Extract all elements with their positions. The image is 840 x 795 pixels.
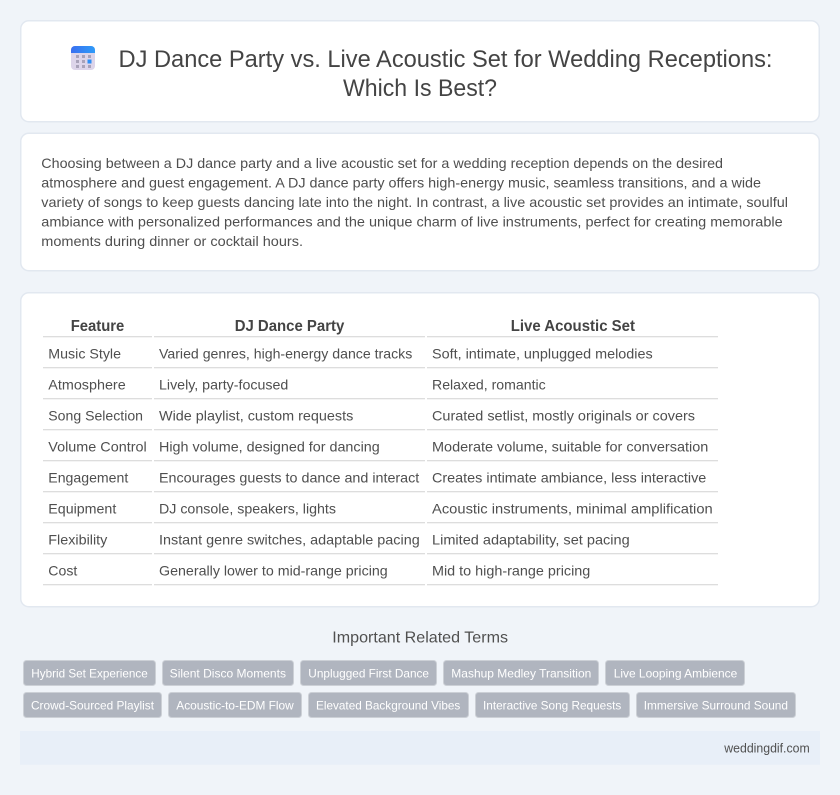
tag: hybrid set experience [24,660,156,686]
table row: music style: Soft, intimate, unplugged melodies [432,345,653,361]
table row: song selection [43,407,718,430]
table row: music style: Music Style [48,345,121,361]
table row: engagement: Encourages guests to dance and interact [159,469,419,485]
tag: interactive song requests: Interactive Song Requests [483,698,621,712]
related terms tags [24,660,796,718]
tag: acoustic-to-edm flow: Acoustic-to-EDM Flow [176,698,294,712]
table row: volume control: High volume, designed for dancing [159,438,380,454]
table row: equipment: Acoustic instruments, minimal amplification [432,500,713,516]
panel: comparison table [21,293,819,607]
title [118,46,772,102]
tag: acoustic-to-edm flow [168,692,302,718]
tag: elevated background vibes: Elevated Background Vibes [316,698,460,712]
tag: mashup medley transition: Mashup Medley Transition [451,666,591,680]
table header row: DJ Dance Party [235,318,344,335]
table row: cost: Cost [48,562,77,578]
tag: crowd-sourced playlist: Crowd-Sourced Playlist [31,698,155,712]
tag: live looping ambience [606,660,744,686]
table row: cost: Mid to high-range pricing [432,562,590,578]
table row: flexibility [43,531,718,554]
title: Which Is Best? [343,75,497,102]
tag: elevated background vibes [308,692,468,718]
panel: description [21,133,819,271]
table row: flexibility: Instant genre switches, adaptable pacing [159,531,420,547]
table row: song selection: Curated setlist, mostly originals or covers [432,407,695,423]
table header row [43,318,718,337]
tag: immersive surround sound: Immersive Surround Sound [644,698,788,712]
table row: music style: Varied genres, high-energy dance tracks [159,345,412,361]
table row: volume control: Volume Control [48,438,147,454]
table row: song selection: Song Selection [48,407,143,423]
tag: crowd-sourced playlist [24,692,162,718]
table row: engagement: Creates intimate ambiance, less interactive [432,469,707,485]
table row: music style [43,345,718,368]
text block: intro paragraph: ambiance with personalized performances and the unique charm of live instruments, perfect for creating memorable [41,214,783,230]
heading: important related terms: Important Related Terms [332,630,508,647]
table row: flexibility: Limited adaptability, set pacing [432,531,630,547]
footer [20,731,820,765]
table row: engagement: Engagement [48,469,128,485]
table row: atmosphere: Relaxed, romantic [432,376,546,392]
tag: unplugged first dance: Unplugged First Dance [308,666,429,680]
icon: calendar [71,46,95,70]
table row: volume control [43,438,718,461]
table row: cost [43,562,718,585]
title: DJ Dance Party vs. Live Acoustic Set for Wedding Receptions: [118,46,772,73]
table row: flexibility: Flexibility [48,531,107,547]
tag: unplugged first dance [300,660,436,686]
text block: intro paragraph: moments during dinner or cocktail hours. [41,233,303,249]
tag: interactive song requests [476,692,630,718]
table row: equipment [43,500,718,523]
tag: immersive surround sound [636,692,796,718]
table row: equipment: Equipment [48,500,116,516]
tag: silent disco moments: Silent Disco Moments [170,666,286,680]
text block: intro paragraph [41,155,788,249]
table row: volume control: Moderate volume, suitable for conversation [432,438,708,454]
table row: cost: Generally lower to mid-range pricing [159,562,388,578]
text block: intro paragraph: variety of songs to keep guests dancing late into the night. In contrast, a live acoustic set provides an intimate, soulful [41,194,788,210]
table row: atmosphere: Lively, party-focused [159,376,288,392]
table row: engagement [43,469,718,492]
footer: weddingdif.com [723,741,810,755]
tag: hybrid set experience: Hybrid Set Experience [31,666,148,680]
tag: mashup medley transition [444,660,598,686]
table row: equipment: DJ console, speakers, lights [159,500,336,516]
table row: atmosphere: Atmosphere [48,376,126,392]
text block: intro paragraph: atmosphere and guest engagement. A DJ dance party offers high-energy music, seamless transitions, and a wide [41,174,761,190]
panel: header [21,21,819,122]
table row: song selection: Wide playlist, custom requests [159,407,353,423]
table row: atmosphere [43,376,718,399]
tag: live looping ambience: Live Looping Ambience [614,666,738,680]
table header row: Feature [71,318,124,335]
text block: intro paragraph: Choosing between a DJ dance party and a live acoustic set for a wedding reception depends on the desired [41,155,723,171]
tag: silent disco moments [162,660,294,686]
table header row: Live Acoustic Set [511,318,636,335]
